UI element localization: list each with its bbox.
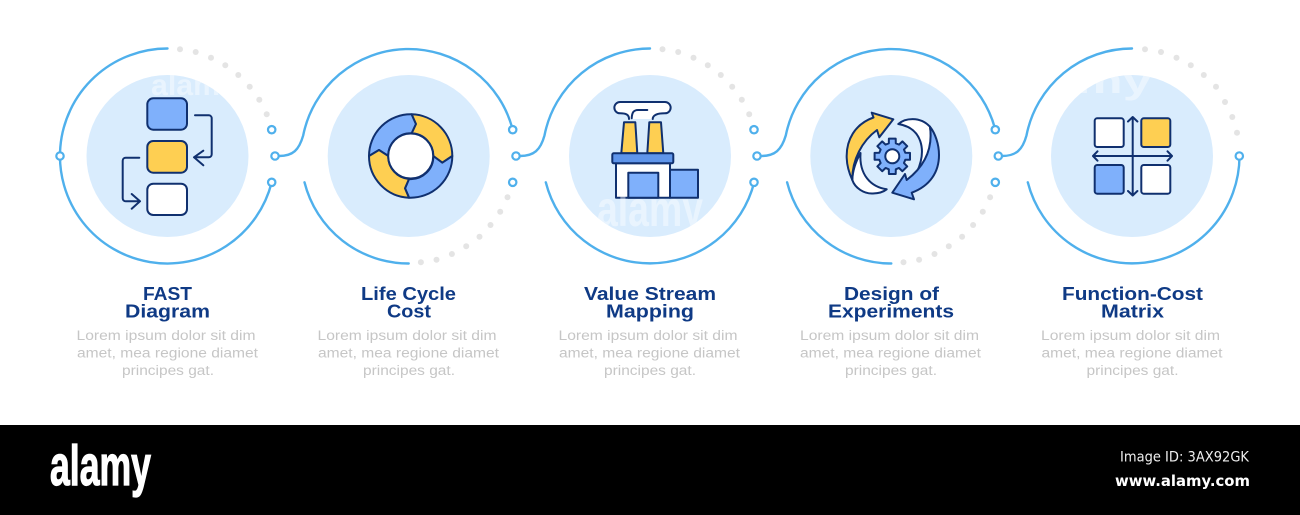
heading 4: Experiments (828, 300, 954, 322)
text block 5: principes gat. (1086, 363, 1178, 378)
step 2: Life Cycle Cost (279, 49, 520, 378)
text block 3 (558, 328, 740, 378)
text block 3: principes gat. (604, 363, 696, 378)
text block 2: principes gat. (363, 363, 455, 378)
dotted arc 1 (177, 46, 270, 117)
step 5: Function-Cost Matrix (1002, 46, 1243, 378)
background circle 3 (569, 75, 731, 237)
background circle 5 (1051, 75, 1213, 237)
text block 3: amet, mea regione diamet (559, 346, 740, 360)
text block 4 (800, 328, 981, 378)
step 4: Design of Experiments (761, 49, 1002, 378)
heading 2 (361, 283, 456, 322)
text block 1 (76, 328, 258, 378)
icon: life cycle ring (369, 114, 452, 198)
watermark fragment 1: alam (151, 69, 220, 102)
dotted arc 3 (660, 46, 752, 117)
nodes 4 (992, 126, 1002, 186)
step 3: Value Stream Mapping (520, 46, 761, 378)
heading 2: Life Cycle (361, 283, 456, 304)
footer bar (0, 425, 1300, 515)
text block 2: amet, mea regione diamet (318, 346, 499, 360)
heading 3: Value Stream (584, 283, 716, 304)
text block 2: Lorem ipsum dolor sit dim (318, 328, 496, 343)
text block 5: Lorem ipsum dolor sit dim (1041, 328, 1220, 343)
alamy logo: alamy (50, 434, 151, 498)
text block 2 (318, 328, 499, 378)
ring 1 (60, 48, 272, 263)
heading 4: Design of (844, 283, 940, 304)
ring 5 with connector (1002, 48, 1240, 263)
background circle 1 (86, 75, 248, 237)
ring 4 with connector (761, 49, 995, 264)
text block 5: amet, mea regione diamet (1042, 346, 1223, 360)
heading 3 (584, 283, 716, 322)
ring 2 with connector (279, 49, 513, 264)
background circle 4 (810, 75, 972, 237)
website: www.alamy.com (1115, 472, 1250, 490)
icon: flow diagram (123, 98, 212, 215)
watermark fragment 5: my (1076, 60, 1152, 101)
heading 4 (828, 283, 954, 322)
text block 1: Lorem ipsum dolor sit dim (76, 328, 256, 343)
image id: Image ID: 3AX92GK (1120, 450, 1249, 466)
heading 3: Mapping (606, 300, 694, 322)
dotted arc 5 (1142, 46, 1240, 136)
heading 1: FAST (143, 283, 193, 304)
text block 1: principes gat. (122, 363, 214, 378)
heading 1 (125, 283, 210, 322)
heading 5: Matrix (1101, 300, 1165, 322)
end node 5 (1236, 152, 1243, 160)
icon: factory (612, 102, 698, 198)
nodes 3 (750, 126, 761, 186)
heading 1: Diagram (125, 300, 210, 322)
dotted arc 4 (900, 194, 993, 265)
text block 5 (1041, 328, 1223, 378)
text block 4: Lorem ipsum dolor sit dim (800, 328, 979, 343)
heading 5 (1062, 283, 1203, 322)
ring 3 with connector (520, 48, 754, 263)
text block 3: Lorem ipsum dolor sit dim (558, 328, 738, 343)
nodes 1 (56, 126, 279, 186)
icon: gear with cycle arrows (847, 113, 939, 199)
nodes 2 (509, 126, 520, 186)
background circle 2 (328, 75, 490, 237)
text block 1: amet, mea regione diamet (77, 346, 258, 360)
step 1: FAST Diagram (56, 46, 279, 378)
text block 4: principes gat. (845, 363, 937, 378)
watermark fragment 3: alamy (597, 181, 703, 237)
text block 4: amet, mea regione diamet (800, 346, 981, 360)
dotted arc 2 (418, 194, 510, 265)
heading 5: Function-Cost (1062, 283, 1203, 304)
heading 2: Cost (387, 300, 431, 322)
icon: matrix (1093, 117, 1172, 196)
